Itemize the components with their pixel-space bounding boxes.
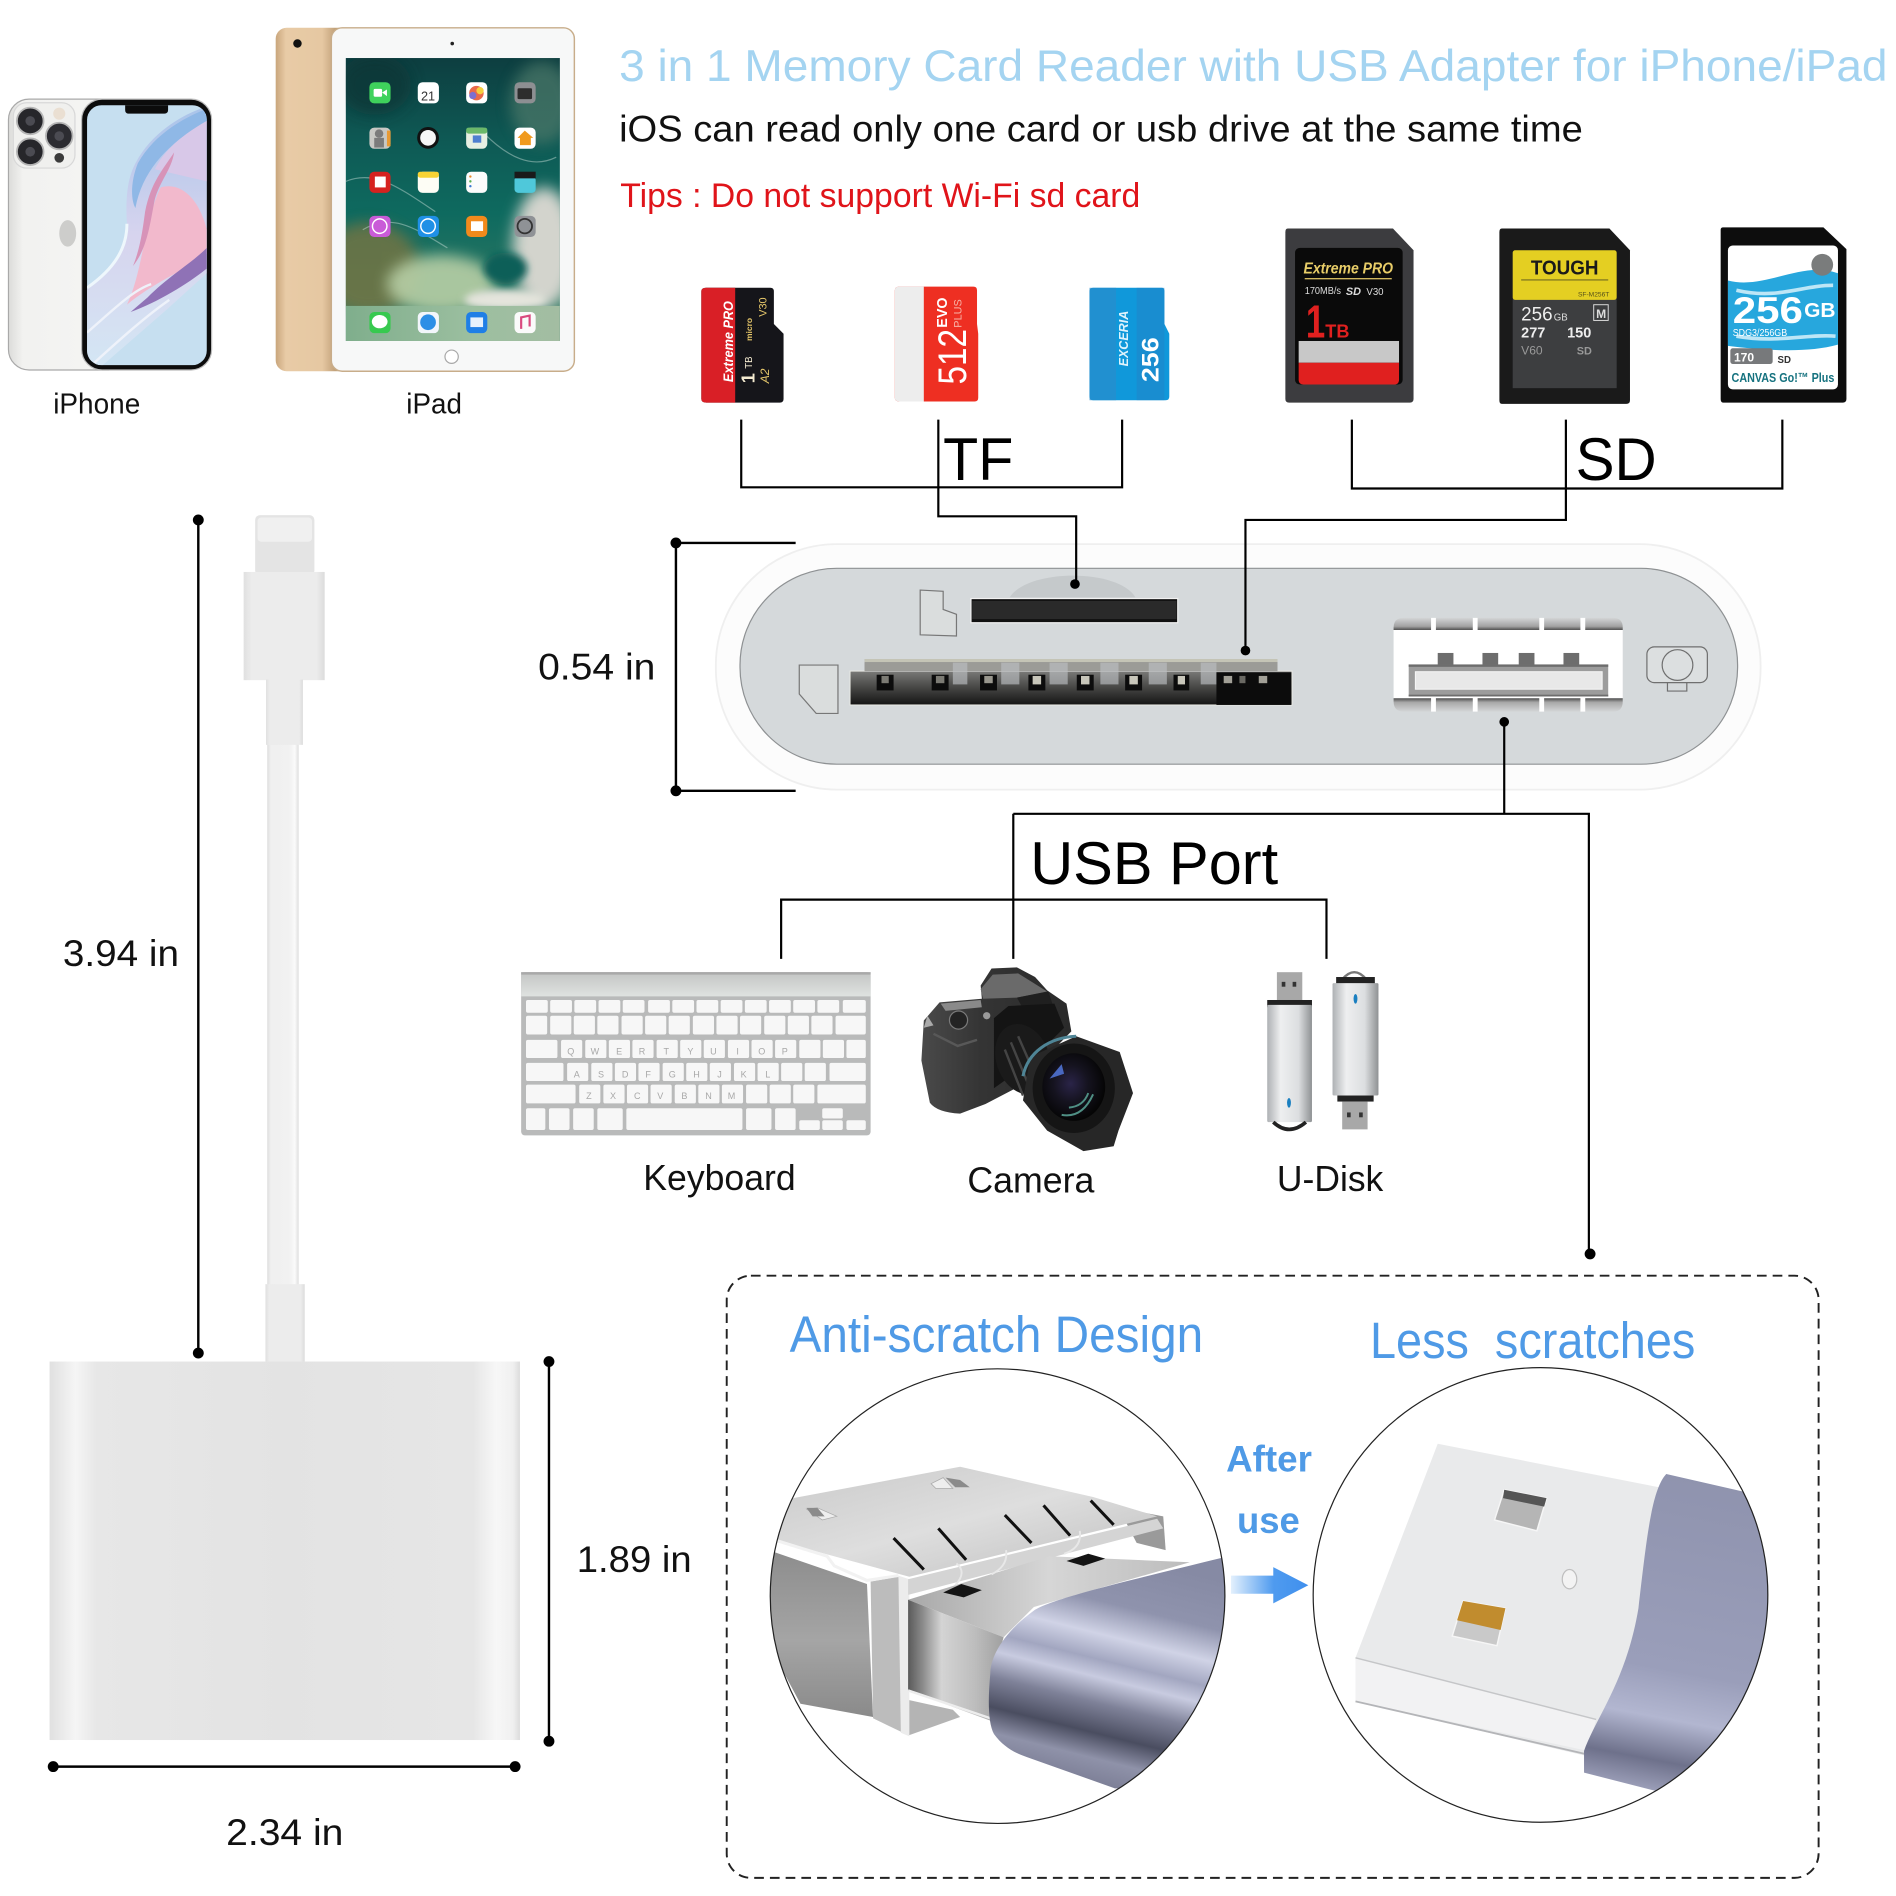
icon: keyboard: J — [717, 1069, 722, 1079]
TF card: Extreme PRO 1TB: micro — [744, 318, 754, 341]
icon: camera outline — [1647, 647, 1707, 691]
icon: keyboard: O — [758, 1046, 765, 1056]
SD card: Canvas Go Plus 256GB: SDG3/256GB — [1733, 328, 1787, 339]
SD card: Tough 256GB: 277 — [1521, 324, 1545, 341]
dimension: 1.89 in — [544, 1356, 692, 1747]
icon: keyboard: N — [705, 1091, 712, 1101]
icon: keyboard — [521, 972, 871, 1135]
SD card: Tough 256GB: TOUGH — [1531, 256, 1599, 279]
SD card: Tough 256GB: SF-M256T — [1578, 291, 1609, 298]
text: After use: use — [1237, 1499, 1300, 1541]
cable — [267, 680, 299, 1362]
dimension: 3.94 in — [63, 515, 204, 1359]
SD card: Extreme PRO 1TB: Extreme PRO — [1304, 260, 1393, 277]
dimension: 2.34 in — [48, 1761, 521, 1853]
dimension: 0.54 in — [538, 537, 796, 796]
under bracket — [909, 1700, 960, 1735]
SD card: Tough 256GB: 256 — [1521, 303, 1553, 325]
icon: keyboard: V — [657, 1091, 663, 1101]
icon: iPad: 21 — [421, 89, 435, 103]
title: 3 in 1 Memory Card Reader with USB Adapter for iPhone/iPad — [619, 42, 1888, 91]
icon: keyboard: U — [710, 1046, 717, 1056]
arrow — [1231, 1567, 1308, 1603]
connector collar — [244, 572, 325, 680]
Camera label: Camera — [967, 1159, 1095, 1200]
icon: keyboard: L — [765, 1069, 770, 1079]
USB Port label: USB Port — [1030, 829, 1278, 897]
icon: keyboard: W — [591, 1046, 600, 1056]
heading: Anti-scratch Design: Anti-scratch Design — [790, 1306, 1203, 1363]
TF card: Extreme PRO 1TB: Extreme PRO — [720, 301, 736, 382]
connector lines: TF bracket — [741, 420, 1122, 584]
TF card: Exceria 256: EXCERIA — [1117, 311, 1131, 366]
dimension: 0.54 in: 0.54 in — [538, 646, 655, 688]
SD card: Extreme PRO 1TB: TB — [1325, 321, 1349, 341]
icon: keyboard: H — [693, 1069, 700, 1079]
shell end wall — [1126, 1513, 1166, 1550]
dimension: 3.94 in: 3.94 in — [63, 932, 179, 974]
SD card: Canvas Go Plus 256GB — [1721, 227, 1846, 403]
connector lines: SD bracket — [1245, 420, 1782, 651]
SD card: Canvas Go Plus 256GB: SD — [1778, 355, 1791, 366]
plug top — [908, 1556, 1190, 1637]
icon: keyboard: D — [622, 1069, 629, 1079]
lightning plug tip — [255, 515, 314, 576]
icon: keyboard: X — [610, 1091, 616, 1101]
dimension: 1.89 in: 1.89 in — [577, 1538, 692, 1580]
TF card: Exceria 256 — [1089, 288, 1169, 400]
TF card: Extreme PRO 1TB: A2 — [758, 368, 772, 384]
panel: anti-scratch comparison — [727, 1276, 1819, 1878]
TF card: EVO 512 — [895, 287, 978, 401]
icon: keyboard: G — [669, 1069, 676, 1079]
icon: keyboard: C — [634, 1091, 641, 1101]
top plate — [762, 1467, 1157, 1577]
icon: keyboard: A — [574, 1069, 581, 1079]
icon: keyboard: E — [616, 1046, 622, 1056]
circle: USB connector after — [1313, 1368, 1778, 1822]
SD card: Canvas Go Plus 256GB: 170 — [1734, 351, 1754, 365]
icon: iPhone — [8, 99, 212, 370]
strain relief top — [266, 680, 303, 745]
text: After use: After — [1226, 1438, 1312, 1480]
SD card: Tough 256GB — [1499, 229, 1630, 404]
SD card: Extreme PRO 1TB: SD — [1346, 286, 1361, 298]
TF card: Extreme PRO 1TB: V30 — [758, 297, 770, 317]
TF card: EVO 512: 512 — [931, 329, 975, 385]
SD card: Extreme PRO 1TB: 170MB/s — [1305, 286, 1341, 297]
TF card: Extreme PRO 1TB: TB — [744, 356, 755, 369]
side collar — [870, 1577, 901, 1732]
SD card: Tough 256GB: GB — [1554, 312, 1568, 323]
TF card: EVO 512: EVO — [935, 297, 951, 328]
SD card: Extreme PRO 1TB: V30 — [1366, 287, 1384, 298]
dimension: 2.34 in: 2.34 in — [226, 1811, 343, 1853]
iPhone label: iPhone — [53, 389, 140, 421]
TF card: Extreme PRO 1TB — [701, 288, 784, 403]
icon: keyboard: R — [639, 1046, 646, 1056]
Keyboard label: Keyboard — [643, 1157, 796, 1198]
text: After use — [1226, 1438, 1312, 1541]
marker dots on reader — [1070, 579, 1509, 727]
tips warning: Tips : Do not support Wi-Fi sd card — [620, 177, 1140, 215]
TF card: Extreme PRO 1TB: 1 — [739, 373, 759, 383]
plug front — [908, 1600, 1004, 1721]
icon: keyboard: I — [736, 1046, 739, 1056]
heading: Less scratches: Less scratches — [1370, 1312, 1695, 1369]
TF card: EVO 512: PLUS — [952, 299, 964, 328]
SD card: Tough 256GB: V60 — [1521, 343, 1543, 357]
SD card: Canvas Go Plus 256GB: GB — [1804, 299, 1836, 322]
SD card: Extreme PRO 1TB: 1 — [1306, 295, 1325, 347]
SD card: Tough 256GB: SD — [1577, 345, 1592, 357]
icon: keyboard: P — [782, 1046, 788, 1056]
SD card: Tough 256GB: M — [1596, 307, 1606, 321]
circle: USB connector before — [756, 1369, 1245, 1823]
front edge highlight — [776, 1540, 898, 1580]
SD slot — [799, 659, 1292, 713]
icon: iPad — [276, 28, 576, 371]
icon: keyboard: Y — [687, 1046, 693, 1056]
iPad label: iPad — [406, 389, 462, 421]
USB port — [1394, 618, 1623, 712]
SD card: Canvas Go Plus 256GB: 256 — [1733, 289, 1803, 331]
TF label: TF — [943, 425, 1013, 493]
lightning adapter — [50, 515, 520, 1740]
icon: keyboard: T — [663, 1046, 669, 1056]
microSD slot — [920, 576, 1178, 636]
SD card: Extreme PRO 1TB — [1285, 229, 1414, 403]
strain relief bottom — [265, 1284, 305, 1362]
icon: camera — [921, 967, 1133, 1151]
blue-grey cap — [989, 1557, 1245, 1790]
SD card: Canvas Go Plus 256GB: CANVAS Go!™ Plus — [1732, 370, 1834, 385]
anti-scratch marker dot — [1585, 1248, 1596, 1259]
adapter body — [50, 1362, 520, 1740]
connector lines: USB port — [781, 722, 1589, 1254]
side face — [770, 1552, 873, 1717]
icon: keyboard: M — [728, 1091, 735, 1101]
hinge band — [908, 1519, 1163, 1595]
icon: keyboard: S — [598, 1069, 604, 1079]
icon: keyboard: B — [681, 1091, 687, 1101]
panel: card reader end view — [716, 544, 1761, 790]
SD card: Tough 256GB: 150 — [1567, 324, 1591, 341]
icon: keyboard: F — [645, 1069, 651, 1079]
U-Disk label: U-Disk — [1277, 1158, 1384, 1199]
icon: keyboard: Z — [586, 1091, 592, 1101]
subtitle: iOS can read only one card or usb drive at the same time — [619, 107, 1583, 149]
icon: keyboard: K — [741, 1069, 747, 1079]
TF card: Exceria 256: 256 — [1137, 337, 1164, 382]
SD label: SD — [1576, 425, 1657, 493]
icon: keyboard: Q — [567, 1046, 574, 1056]
icon: U-Disk drives — [1267, 972, 1378, 1129]
